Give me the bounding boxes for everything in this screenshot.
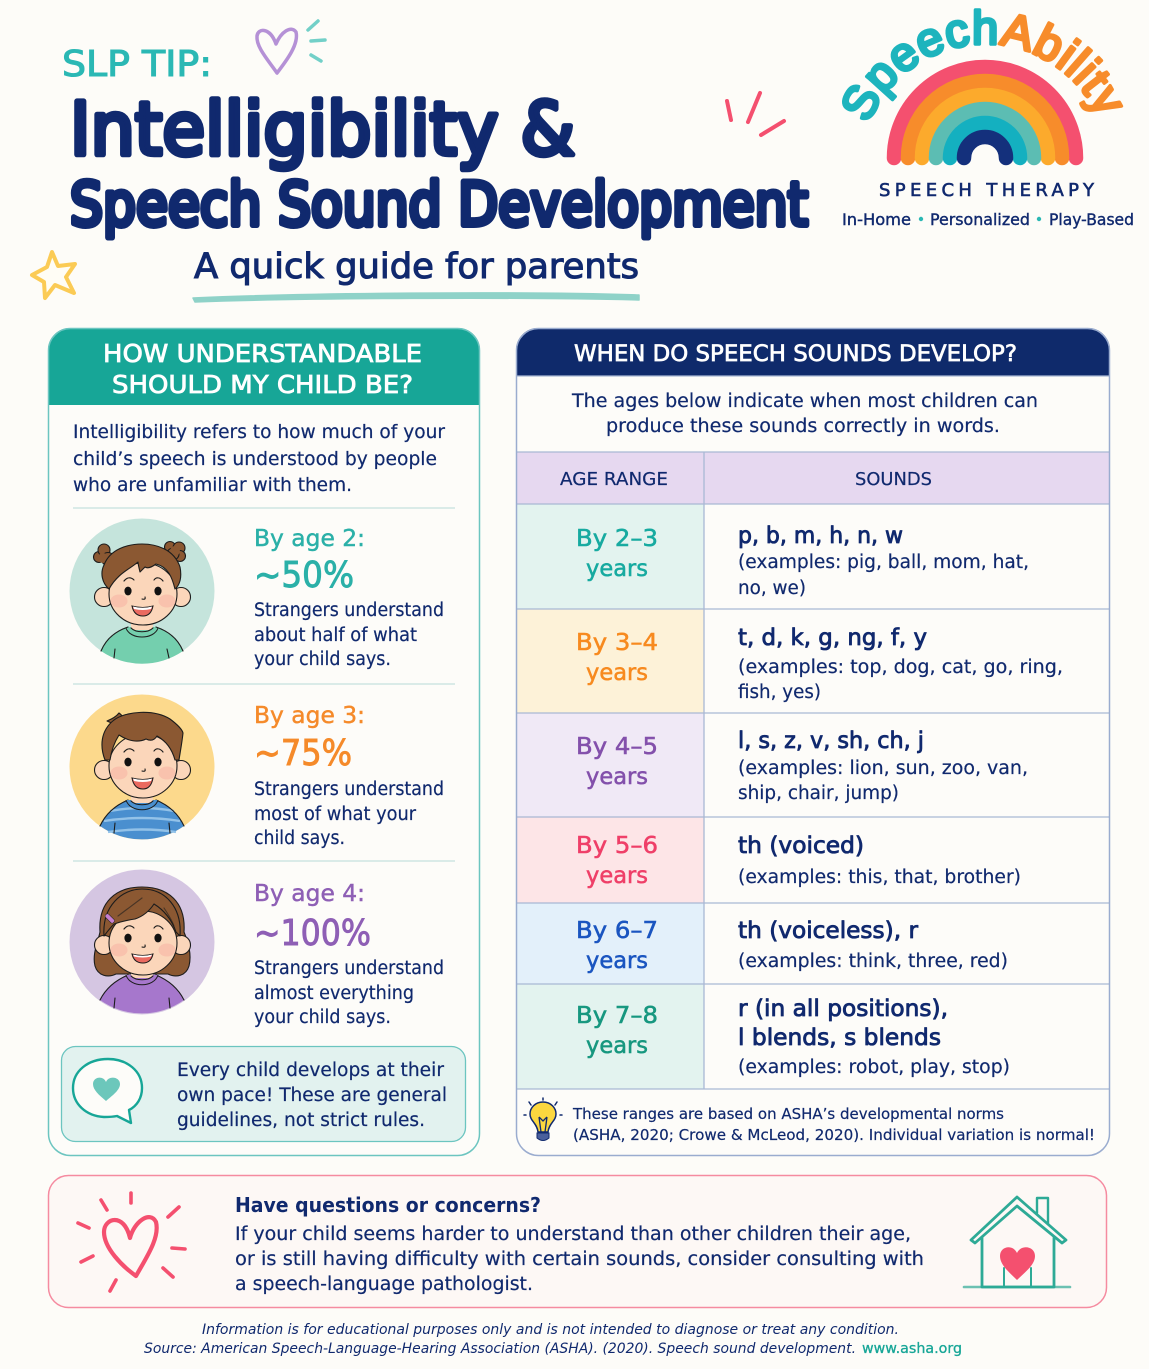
table row: 2-3 years: (examples: pig, ball, mom, hat, — [738, 552, 1029, 573]
pigtail buns — [94, 542, 186, 566]
logo tagline: Personalized — [930, 210, 1030, 229]
table row: 2-3 years: years — [586, 554, 648, 582]
illustration: child age 4 — [70, 870, 214, 1014]
table intro text: produce these sounds correctly in words. — [606, 416, 1000, 437]
logo curved wordmark: SpeechAbility — [842, 8, 1124, 120]
table row: 6-7 years — [517, 903, 1008, 984]
text: by age 2: about half of what — [254, 625, 417, 646]
text: by age 4: your child says. — [254, 1007, 391, 1028]
icon: purple heart with dashes — [257, 21, 325, 73]
table footnote: (ASHA, 2020; Crowe & McLeod, 2020). Individual variation is normal! — [573, 1126, 1095, 1144]
table row: 5-6 years — [517, 817, 1021, 903]
logo subtitle: SPEECH THERAPY — [879, 180, 1095, 201]
icon: pink sparkle dashes — [727, 93, 784, 135]
table header row — [517, 452, 1109, 504]
text: by age 3: Strangers understand — [254, 779, 444, 800]
text: by age 4: almost everything — [254, 983, 414, 1004]
text: by age 4 — [254, 879, 444, 1028]
callout text — [177, 1060, 447, 1131]
icon: heart with rays — [78, 1193, 185, 1291]
table row: 4-5 years: By 4–5 — [576, 732, 658, 760]
text: by age 3: By age 3: — [254, 701, 365, 729]
table row: 6-7 years: years — [586, 946, 648, 974]
panel header: speech sounds — [516, 328, 1110, 376]
icon: speech bubble heart — [73, 1059, 142, 1123]
header: title block — [62, 44, 808, 302]
table footnote — [572, 1105, 1095, 1144]
table row: 3-4 years: years — [586, 658, 648, 686]
table row: 4-5 years: (examples: lion, sun, zoo, van, — [738, 758, 1028, 779]
table row: 5-6 years: th (voiced) — [738, 833, 864, 859]
text: by age 3: most of what your — [254, 804, 416, 825]
table row: 7-8 years: l blends, s blends — [738, 1025, 941, 1051]
table row: 4-5 years: l, s, z, v, sh, ch, j — [738, 728, 924, 754]
questions text: or is still having difficulty with certain sounds, consider consulting with — [235, 1249, 924, 1270]
text: by age 2: Strangers understand — [254, 600, 444, 621]
table row: 4-5 years: ship, chair, jump) — [738, 783, 899, 804]
text: by age 2: By age 2: — [254, 524, 365, 552]
icon: light bulb — [524, 1098, 562, 1140]
subtitle: A quick guide for parents — [194, 247, 639, 287]
logo tagline — [842, 210, 1134, 229]
text: by age 2: your child says. — [254, 649, 391, 670]
intro paragraph: who are unfamiliar with them. — [73, 474, 352, 496]
intro paragraph: Intelligibility refers to how much of your — [73, 421, 445, 443]
illustration: child age 3 — [70, 694, 214, 840]
table row: 3-4 years — [517, 609, 1063, 713]
table row: 5-6 years: By 5–6 — [576, 831, 658, 859]
icon: house with heart — [964, 1197, 1070, 1287]
table row: 3-4 years: t, d, k, g, ng, f, y — [738, 625, 927, 651]
table row: 7-8 years: r (in all positions), — [738, 996, 948, 1022]
table intro text — [571, 391, 1038, 437]
illustration: child age 2 — [70, 518, 214, 664]
table row: 2-3 years: p, b, m, h, n, w — [738, 523, 903, 549]
table row: 6-7 years: (examples: think, three, red) — [738, 951, 1008, 972]
questions text — [235, 1193, 924, 1295]
intro paragraph — [73, 421, 445, 496]
table row: 2-3 years: no, we) — [738, 578, 806, 599]
callout: every child develops — [62, 1046, 466, 1142]
callout text: Every child develops at their — [177, 1060, 444, 1081]
table row: 5-6 years: (examples: this, that, brother) — [738, 867, 1021, 888]
panel: how understandable — [48, 328, 480, 1156]
panel header: how understandable — [48, 328, 480, 405]
intro paragraph: child’s speech is understood by people — [73, 448, 437, 470]
icon: yellow star — [32, 252, 75, 298]
text: by age 3 — [254, 701, 444, 849]
text: by age 4: ~100% — [254, 913, 371, 954]
text: by age 3: ~75% — [254, 733, 352, 774]
footer disclaimer and source: Source: American Speech-Language-Hearing Association (ASHA). (2020). Speech sound development. — [144, 1341, 856, 1357]
logo tagline: In-Home — [842, 210, 911, 229]
table row: 4-5 years: years — [586, 762, 648, 790]
table row: 2-3 years: By 2–3 — [576, 524, 658, 552]
table header row: SOUNDS — [855, 469, 932, 490]
logo wordmark baseline path — [860, 44, 1110, 169]
text: by age 4: By age 4: — [254, 879, 365, 907]
table row: 3-4 years: By 3–4 — [576, 628, 658, 656]
footer disclaimer and source: Information is for educational purposes only and is not intended to diagnose or treat any condition. — [202, 1322, 899, 1338]
text: by age 2 — [254, 524, 444, 670]
table row: 7-8 years: years — [586, 1031, 648, 1059]
eyebrow: SLP TIP: SLP TIP: — [62, 44, 212, 85]
footer disclaimer and source: www.asha.org — [862, 1341, 962, 1357]
text: by age 4: Strangers understand — [254, 958, 444, 979]
callout text: guidelines, not strict rules. — [177, 1110, 425, 1131]
title line 2: Speech Sound Development — [70, 170, 808, 240]
logo rainbow — [894, 67, 1076, 158]
callout text: own pace! These are general — [177, 1085, 447, 1106]
text: by age 3: child says. — [254, 828, 345, 849]
panel header: how understandable: SHOULD MY CHILD BE? — [112, 370, 413, 399]
logo: SpeechAbility rainbow — [842, 8, 1134, 229]
questions text: a speech-language pathologist. — [235, 1274, 533, 1295]
panel: when do speech sounds develop — [516, 328, 1110, 1156]
questions text: If your child seems harder to understand than other children their age, — [235, 1224, 911, 1245]
panel header: how understandable: HOW UNDERSTANDABLE — [103, 339, 422, 368]
table row: 7-8 years: By 7–8 — [576, 1001, 658, 1029]
table footnote: These ranges are based on ASHA’s developmental norms — [572, 1105, 1004, 1123]
table row: 6-7 years: By 6–7 — [576, 916, 658, 944]
panel: have questions — [48, 1176, 1106, 1308]
table row: 3-4 years: fish, yes) — [738, 682, 821, 703]
footer disclaimer and source — [144, 1322, 962, 1357]
table row: 2-3 years — [517, 504, 1029, 609]
table row: 7-8 years: (examples: robot, play, stop) — [738, 1057, 1010, 1078]
table row: 7-8 years — [517, 984, 1010, 1089]
table row: 3-4 years: (examples: top, dog, cat, go, ring, — [738, 657, 1063, 678]
logo tagline: Play-Based — [1049, 210, 1134, 229]
table header row: AGE RANGE — [560, 469, 668, 490]
text: by age 2: ~50% — [254, 555, 354, 596]
table row: 5-6 years: years — [586, 861, 648, 889]
subtitle brush underline — [193, 293, 639, 302]
title line 1: Intelligibility & — [70, 88, 575, 172]
questions text: Have questions or concerns? — [235, 1193, 541, 1217]
panel header: speech sounds: WHEN DO SPEECH SOUNDS DEVELOP? — [574, 342, 1017, 367]
table row: 4-5 years — [517, 713, 1028, 817]
table intro text: The ages below indicate when most children can — [571, 391, 1038, 412]
table row: 6-7 years: th (voiceless), r — [738, 918, 919, 944]
